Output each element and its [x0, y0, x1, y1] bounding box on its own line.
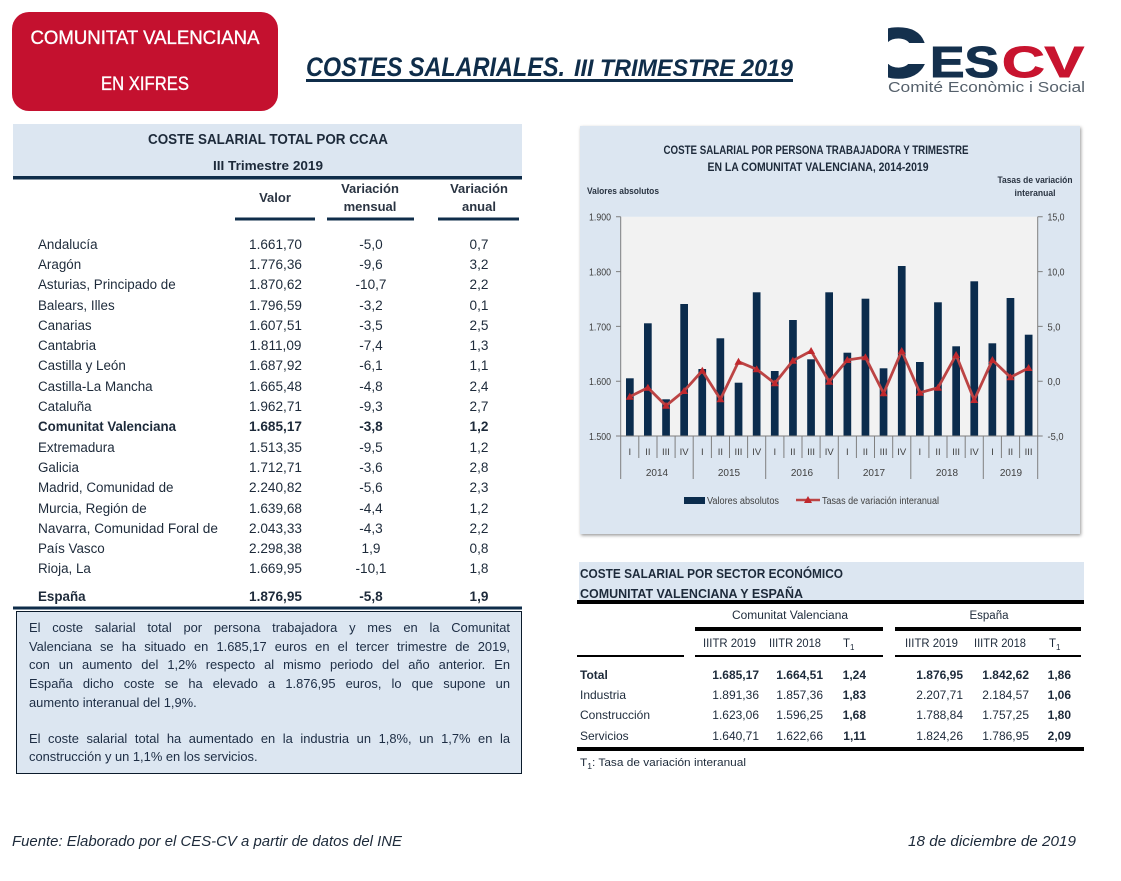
- column headers: anual: [462, 199, 496, 214]
- logo: CES-CV: C: [868, 16, 925, 92]
- text block: commentary: El coste salarial total por persona trabajadora y mes en la Comunitat: [29, 620, 510, 635]
- column headers: 1: [1056, 643, 1061, 652]
- column headers: [703, 638, 1061, 652]
- region names: Galicia: [38, 460, 79, 475]
- badge: Comunitat Valenciana en xifres: [12, 12, 278, 111]
- Espana values: 1.757,25: [982, 708, 1029, 722]
- variacion anual column: 1,3: [470, 338, 488, 353]
- Comunitat Valenciana values: 1,68: [843, 708, 866, 722]
- sector table header band: COMUNITAT VALENCIANA Y ESPAÑA: [580, 586, 803, 601]
- region names: Asturias, Principado de: [38, 277, 176, 292]
- region names: Balears, Illes: [38, 298, 115, 313]
- variacion anual column: 2,4: [470, 379, 489, 394]
- title: [306, 52, 794, 82]
- quarter labels: I: [918, 447, 921, 458]
- year labels: 2017: [863, 468, 886, 479]
- Comunitat Valenciana values: 1,24: [843, 668, 866, 682]
- region names: Extremadura: [38, 440, 115, 455]
- Espana values: 2.184,57: [982, 688, 1029, 702]
- variacion anual column: 2,2: [470, 521, 488, 536]
- column headers: mensual: [344, 199, 396, 214]
- quarter labels: IV: [825, 447, 834, 458]
- quarter labels: IV: [680, 447, 689, 458]
- text block: commentary: Valenciana se ha situado en 1.685,17 euros en el tercer trimestre de 2019,: [29, 639, 510, 654]
- region names: Aragón: [38, 257, 81, 272]
- group headers: España: [969, 610, 1009, 622]
- variacion mensual column: [356, 237, 386, 604]
- variacion mensual column: -3,5: [359, 318, 383, 333]
- left axis labels: 1.600: [589, 376, 611, 388]
- region names: España: [38, 589, 86, 604]
- valor column: 1.811,09: [250, 338, 301, 353]
- axis titles: Tasas de variación: [998, 175, 1073, 186]
- variacion anual column: 0,7: [470, 237, 488, 252]
- variacion mensual column: -4,8: [359, 379, 383, 394]
- variacion mensual column: -4,4: [359, 501, 383, 516]
- Espana values: 1,06: [1048, 688, 1071, 702]
- valor column: [249, 237, 302, 604]
- Comunitat Valenciana values: 1.622,66: [776, 729, 823, 743]
- column headers: Variación: [450, 181, 508, 196]
- title: III TRIMESTRE 2019: [574, 55, 794, 82]
- region names: Canarias: [38, 318, 92, 333]
- Espana values: 1.824,26: [916, 729, 963, 743]
- variacion anual column: 3,2: [470, 257, 488, 272]
- quarter labels: IV: [752, 447, 762, 458]
- quarter labels: I: [701, 447, 704, 458]
- valor column: 2.240,82: [249, 480, 302, 495]
- Espana values: 1.786,95: [982, 729, 1029, 743]
- badge: Comunitat Valenciana en xifres: EN XIFRES: [101, 74, 189, 95]
- valor column: 1.962,71: [249, 399, 302, 414]
- Espana values: 2.207,71: [916, 688, 963, 702]
- title: COSTES SALARIALES.: [306, 52, 565, 82]
- footnote: T: [580, 757, 587, 769]
- region names: Rioja, La: [38, 561, 91, 576]
- left axis labels: 1.900: [589, 212, 611, 224]
- left axis labels: 1.700: [589, 322, 611, 334]
- panel: coste salarial total por CCAA: [13, 124, 522, 610]
- region names: País Vasco: [38, 541, 105, 556]
- variacion anual column: 0,1: [470, 298, 488, 313]
- variacion anual column: 1,2: [470, 501, 488, 516]
- Comunitat Valenciana values: 1.685,17: [712, 668, 759, 682]
- region names: Andalucía: [38, 237, 98, 252]
- valor column: 2.298,38: [249, 541, 302, 556]
- variacion anual column: 2,3: [470, 480, 488, 495]
- text block: commentary: El coste salarial total ha aumentado en la industria un 1,8%, un 1,7% en la: [29, 731, 510, 746]
- column headers: [235, 181, 519, 220]
- column headers: IIITR 2019: [703, 638, 756, 650]
- year labels: 2014: [646, 468, 669, 479]
- quarter labels: II: [1008, 447, 1013, 458]
- variacion mensual column: -3,8: [359, 419, 383, 434]
- Comunitat Valenciana values: 1.891,36: [712, 688, 759, 702]
- valor column: 1.639,68: [249, 501, 302, 516]
- variacion mensual column: -3,2: [359, 298, 383, 313]
- axis titles: [587, 175, 1073, 199]
- quarter labels: I: [773, 447, 776, 458]
- quarter labels: III: [952, 447, 960, 458]
- row labels: Construcción: [580, 708, 650, 722]
- right axis labels: 15,0: [1048, 212, 1065, 224]
- variacion mensual column: -5,8: [359, 589, 383, 604]
- year labels: 2015: [718, 468, 741, 479]
- chart title: COSTE SALARIAL POR PERSONA TRABAJADORA Y TRIMESTRE: [664, 145, 969, 157]
- column headers: T: [843, 638, 850, 650]
- Comunitat Valenciana values: 1.857,36: [776, 688, 823, 702]
- variacion mensual column: -3,6: [359, 460, 383, 475]
- row labels: [580, 668, 650, 743]
- variacion mensual column: -5,0: [359, 237, 383, 252]
- Comunitat Valenciana values: 1.596,25: [776, 708, 823, 722]
- variacion anual column: 1,8: [470, 561, 488, 576]
- variacion anual column: 1,9: [470, 589, 489, 604]
- right axis labels: 10,0: [1048, 266, 1065, 278]
- valor column: 1.870,62: [249, 277, 302, 292]
- region names: Navarra, Comunidad Foral de: [38, 521, 218, 536]
- Espana values: 1.842,62: [982, 668, 1029, 682]
- region names: Cataluña: [38, 399, 92, 414]
- variacion mensual column: -9,3: [359, 399, 383, 414]
- valor column: 1.687,92: [249, 358, 302, 373]
- left axis labels: [589, 212, 611, 443]
- Espana values: [916, 668, 1071, 743]
- table header band: [13, 124, 522, 180]
- text block: commentary: con un aumento del 1,2% respecto al mismo periodo del año anterior. En: [29, 657, 510, 672]
- region names: Comunitat Valenciana: [38, 419, 177, 434]
- variacion anual column: 2,8: [470, 460, 488, 475]
- badge: Comunitat Valenciana en xifres: COMUNITAT VALENCIANA: [30, 28, 260, 49]
- variacion mensual column: -6,1: [359, 358, 383, 373]
- variacion anual column: 1,1: [470, 358, 488, 373]
- Espana values: 1,86: [1048, 668, 1071, 682]
- chart title: [664, 145, 969, 174]
- legend: Valores absolutos: [707, 496, 779, 507]
- valor column: 1.513,35: [249, 440, 302, 455]
- column headers: Valor: [259, 190, 291, 205]
- chart title: EN LA COMUNITAT VALENCIANA, 2014-2019: [708, 162, 928, 174]
- valor column: 1.661,70: [249, 237, 302, 252]
- variacion mensual column: -9,6: [359, 257, 383, 272]
- column headers: Variación: [341, 181, 399, 196]
- variacion mensual column: -10,1: [356, 561, 386, 576]
- region names: [38, 237, 218, 604]
- table header band: III Trimestre 2019: [213, 159, 323, 173]
- text block: commentary: aumento interanual del 1,9%.: [29, 695, 197, 710]
- logo: CES-CV: Comité Econòmic i Social: [888, 79, 1085, 96]
- logo: CES-CV: ES: [930, 38, 999, 87]
- text block: commentary: España dicho coste se ha elevado a 1.876,95 euros, lo que supone un: [29, 676, 510, 691]
- variacion mensual column: -10,7: [356, 277, 386, 292]
- Comunitat Valenciana values: 1.664,51: [776, 668, 823, 682]
- column headers: T: [1049, 638, 1056, 650]
- region names: Cantabria: [38, 338, 97, 353]
- panel: chart card: [580, 126, 1080, 534]
- valor column: 1.712,71: [249, 460, 302, 475]
- quarter labels: I: [628, 447, 631, 458]
- quarter labels: IV: [970, 447, 979, 458]
- quarter labels: II: [790, 447, 796, 458]
- valor column: 2.043,33: [249, 521, 302, 536]
- text block: commentary: construcción y un 1,1% en los servicios.: [29, 749, 258, 764]
- Comunitat Valenciana values: [712, 668, 866, 743]
- legend: Tasas de variación interanual: [822, 496, 939, 507]
- variacion anual column: 2,2: [470, 277, 488, 292]
- logo: CES-CV: [888, 27, 1084, 92]
- quarter labels: I: [846, 447, 849, 458]
- footnote: 1: [587, 762, 593, 771]
- quarter labels: IV: [897, 447, 907, 458]
- region names: Murcia, Región de: [38, 501, 147, 516]
- quarter labels: I: [991, 447, 994, 458]
- panel: coste salarial por sector economico: [577, 562, 1084, 771]
- quarter labels: [628, 447, 1033, 458]
- column headers: IIITR 2019: [905, 638, 958, 650]
- quarter labels: II: [645, 447, 651, 458]
- quarter labels: III: [880, 447, 888, 458]
- variacion mensual column: 1,9: [362, 541, 380, 556]
- quarter labels: III: [662, 447, 670, 458]
- Espana values: 1.788,84: [916, 708, 963, 722]
- Espana values: 1.876,95: [916, 668, 963, 682]
- row labels: Total: [580, 668, 608, 682]
- quarter labels: II: [863, 447, 868, 458]
- group headers: [577, 610, 1081, 657]
- bar chart: valores absolutos: [626, 266, 1032, 436]
- column headers: IIITR 2018: [769, 638, 821, 650]
- left axis labels: 1.800: [589, 266, 611, 278]
- valor column: 1.669,95: [249, 561, 302, 576]
- table header band: COSTE SALARIAL TOTAL POR CCAA: [148, 132, 388, 148]
- variacion mensual column: -9,5: [359, 440, 383, 455]
- region names: Castilla y León: [38, 358, 126, 373]
- quarter labels: II: [718, 447, 723, 458]
- valor column: 1.607,51: [249, 318, 302, 333]
- footer date: 18 de diciembre de 2019: [908, 834, 1076, 850]
- variacion anual column: 1,2: [470, 440, 488, 455]
- column headers: IIITR 2018: [974, 638, 1026, 650]
- year labels: 2019: [1000, 468, 1023, 479]
- line chart: tasas de variacion interanual: [630, 351, 1029, 406]
- region names: Madrid, Comunidad de: [38, 480, 173, 495]
- right axis labels: [1048, 212, 1065, 443]
- Espana values: 1,80: [1048, 708, 1071, 722]
- right axis labels: 0,0: [1048, 376, 1061, 388]
- variacion mensual column: -5,6: [359, 480, 383, 495]
- row labels: Servicios: [580, 729, 629, 743]
- text block: commentary: [16, 611, 522, 774]
- valor column: 1.876,95: [249, 589, 302, 604]
- variacion anual column: [470, 237, 489, 604]
- variacion mensual column: -7,4: [359, 338, 383, 353]
- year labels: [646, 468, 1023, 479]
- group headers: Comunitat Valenciana: [732, 610, 849, 622]
- year labels: 2016: [791, 468, 814, 479]
- variacion anual column: 1,2: [470, 419, 489, 434]
- variacion anual column: 0,8: [470, 541, 488, 556]
- logo: CES-CV: CV: [1002, 38, 1085, 87]
- valor column: 1.665,48: [249, 379, 302, 394]
- plot area: [621, 217, 1038, 436]
- Comunitat Valenciana values: 1,11: [843, 729, 866, 743]
- right axis labels: -5,0: [1048, 431, 1064, 443]
- region names: Castilla-La Mancha: [38, 379, 153, 394]
- quarter labels: III: [735, 447, 742, 458]
- left axis labels: 1.500: [589, 431, 611, 443]
- quarter labels: II: [935, 447, 941, 458]
- right axis labels: 5,0: [1048, 322, 1061, 334]
- footer source: Fuente: Elaborado por el CES-CV a partir de datos del INE: [12, 834, 402, 850]
- variacion mensual column: -4,3: [359, 521, 383, 536]
- column headers: 1: [850, 643, 855, 652]
- variacion anual column: 2,5: [470, 318, 488, 333]
- axis titles: interanual: [1014, 188, 1056, 199]
- Comunitat Valenciana values: 1.623,06: [712, 708, 759, 722]
- valor column: 1.685,17: [249, 419, 302, 434]
- variacion anual column: 2,7: [470, 399, 488, 414]
- valor column: 1.776,36: [249, 257, 302, 272]
- Espana values: 2,09: [1048, 729, 1071, 743]
- year labels: 2018: [936, 468, 959, 479]
- row labels: Industria: [580, 688, 626, 702]
- sector table header band: COSTE SALARIAL POR SECTOR ECONÓMICO: [580, 566, 843, 581]
- footnote: : Tasa de variación interanual: [592, 757, 746, 769]
- quarter labels: III: [1025, 447, 1033, 458]
- axis titles: Valores absolutos: [587, 186, 659, 197]
- sector table header band: [577, 562, 1084, 604]
- axes: [616, 217, 1043, 479]
- Comunitat Valenciana values: 1,83: [843, 688, 866, 702]
- quarter labels: III: [807, 447, 815, 458]
- legend: [684, 496, 939, 507]
- Comunitat Valenciana values: 1.640,71: [712, 729, 759, 743]
- valor column: 1.796,59: [249, 298, 302, 313]
